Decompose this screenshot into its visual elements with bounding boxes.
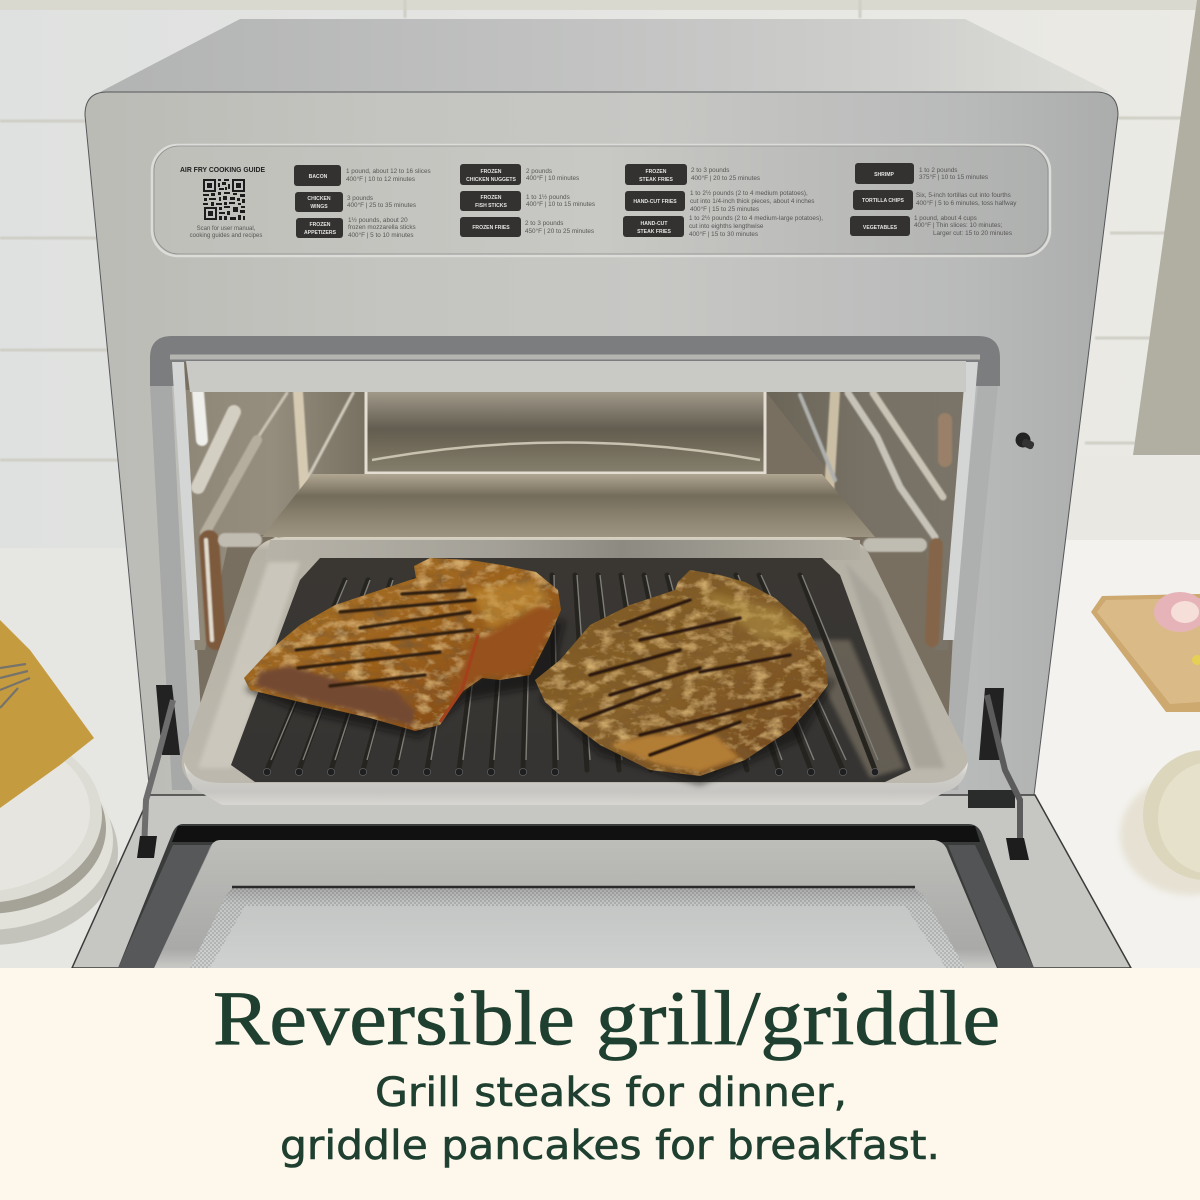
entries column 4: 400°F | 5 to 6 minutes, toss halfway [916,199,1017,207]
entries column 4: Six, 5-inch tortillas cut into fourths [916,192,1011,199]
entries column 3: FROZEN [646,169,667,175]
subheading: griddle pancakes for breakfast. [280,1123,940,1169]
cavity floor [262,474,875,537]
entries column 2: CHICKEN NUGGETS [466,177,517,183]
grill ridges [267,575,875,770]
entries column 1: 1½ pounds, about 20 [348,216,408,224]
entries column 1: 1 pound, about 12 to 16 slices [346,168,431,175]
small plate right [1120,750,1200,895]
tray rim [182,537,968,805]
entries column 3: 400°F | 15 to 25 minutes [690,205,759,213]
left door arm [137,685,180,858]
entries column 3: HAND-CUT [641,221,668,227]
right steak grill marks [580,600,800,755]
entries column 1: WINGS [310,204,328,210]
entries column 4: 375°F | 10 to 15 minutes [919,173,988,181]
entries column 2: 400°F | 10 to 15 minutes [526,200,595,208]
entries column 4: 1 pound, about 4 cups [914,215,977,222]
yellow napkin [0,620,94,808]
entries column 1: 3 pounds [347,195,373,202]
stacked plates left [0,727,118,945]
entries column 3: cut into 1/4-inch thick pieces, about 4 inches [690,198,814,205]
door mesh window [190,888,965,968]
grill ridge pips [263,768,879,776]
entries column 1: CHICKEN [307,196,331,202]
chrome trim left and right [172,362,978,640]
entries column 3: 400°F | 20 to 25 minutes [691,174,760,182]
entries column 3: 400°F | 15 to 30 minutes [689,230,758,238]
entries column 4: 1 to 2 pounds [919,167,957,174]
entries column 2: FISH STICKS [475,203,507,209]
entries column 2: 2 pounds [526,168,552,175]
entries column 1: frozen mozzarella sticks [348,224,416,231]
entries column 3: STEAK FRIES [639,177,673,183]
QR caption [190,226,262,239]
left side wall and rails [178,390,365,650]
guide heading: AIR FRY COOKING GUIDE [180,165,265,174]
entries column 4: VEGETABLES [863,225,898,231]
entries column 3: 1 to 2½ pounds (2 to 4 medium potatoes), [690,189,808,197]
entries column 1: BACON [309,174,328,180]
entries column 1: 400°F | 25 to 35 minutes [347,201,416,209]
caption banner background [0,968,1200,1200]
door hinge button [1016,432,1035,450]
right side wall and rails [766,392,968,650]
oven front body [85,92,1118,795]
entries column 4: TORTILLA CHIPS [862,198,905,204]
entries column 2: 450°F | 20 to 25 minutes [525,227,594,235]
right grilled steak [535,570,835,785]
cutting board right [1091,594,1200,712]
entries column 2: FROZEN [481,169,502,175]
entries column 3: HAND-CUT FRIES [633,199,677,205]
entries column 1: APPETIZERS [304,230,337,236]
entries column 2 [460,164,595,237]
entries column 3: 1 to 2½ pounds (2 to 4 medium-large potatoes), [689,214,823,222]
left grilled steak [244,558,565,738]
tray grill plate [231,558,911,782]
oven door opened [72,795,1131,968]
subheading [280,1070,940,1169]
entries column 3: 2 to 3 pounds [691,167,729,174]
QR caption: Scan for user manual, [197,226,256,232]
entries column 1: 400°F | 5 to 10 minutes [348,231,414,239]
sliced onion on board [1154,592,1200,665]
entries column 1 [294,165,431,239]
entries column 2: 2 to 3 pounds [525,220,563,227]
left steak grill marks [296,590,475,686]
entries column 3: STEAK FRIES [637,229,671,235]
entries column 1: FROZEN [310,222,331,228]
oven cavity frame [150,336,1000,790]
door window frame [118,824,1034,968]
entries column 2: FROZEN FRIES [472,225,510,231]
entries column 3: cut into eighths lengthwise [689,223,764,230]
QR caption: cooking guides and recipes [190,233,262,239]
tray front lip [184,762,968,805]
entries column 2: 1 to 1½ pounds [526,193,570,201]
door inner glass [154,840,997,968]
inner back wall reflection [365,392,766,474]
entries column 2: 400°F | 10 minutes [526,174,579,182]
entries column 4: 400°F | Thin slices: 10 minutes; [914,221,1003,229]
inner top lip band [186,361,966,392]
oven cavity interior [172,362,978,780]
cabinet panel at right [1133,0,1200,455]
right door arm [968,688,1029,860]
grill griddle tray [182,537,968,805]
entries column 4: Larger cut: 15 to 20 minutes [933,230,1012,237]
control panel cooking guide [152,145,1050,256]
entries column 3 [623,164,823,238]
entries column 2: FROZEN [481,195,502,201]
QR code [203,179,245,220]
kitchen background: tiled wall [0,0,1200,560]
counter top [0,456,1200,970]
headline: Reversible grill/griddle [213,975,1000,1061]
entries column 4 [850,163,1017,237]
entries column 4: SHRIMP [874,172,895,178]
oven top surface [100,19,1110,92]
subheading: Grill steaks for dinner, [375,1070,847,1116]
grill ridge highlights [271,575,878,760]
entries column 1: 400°F | 10 to 12 minutes [346,175,415,183]
fork [0,664,30,708]
